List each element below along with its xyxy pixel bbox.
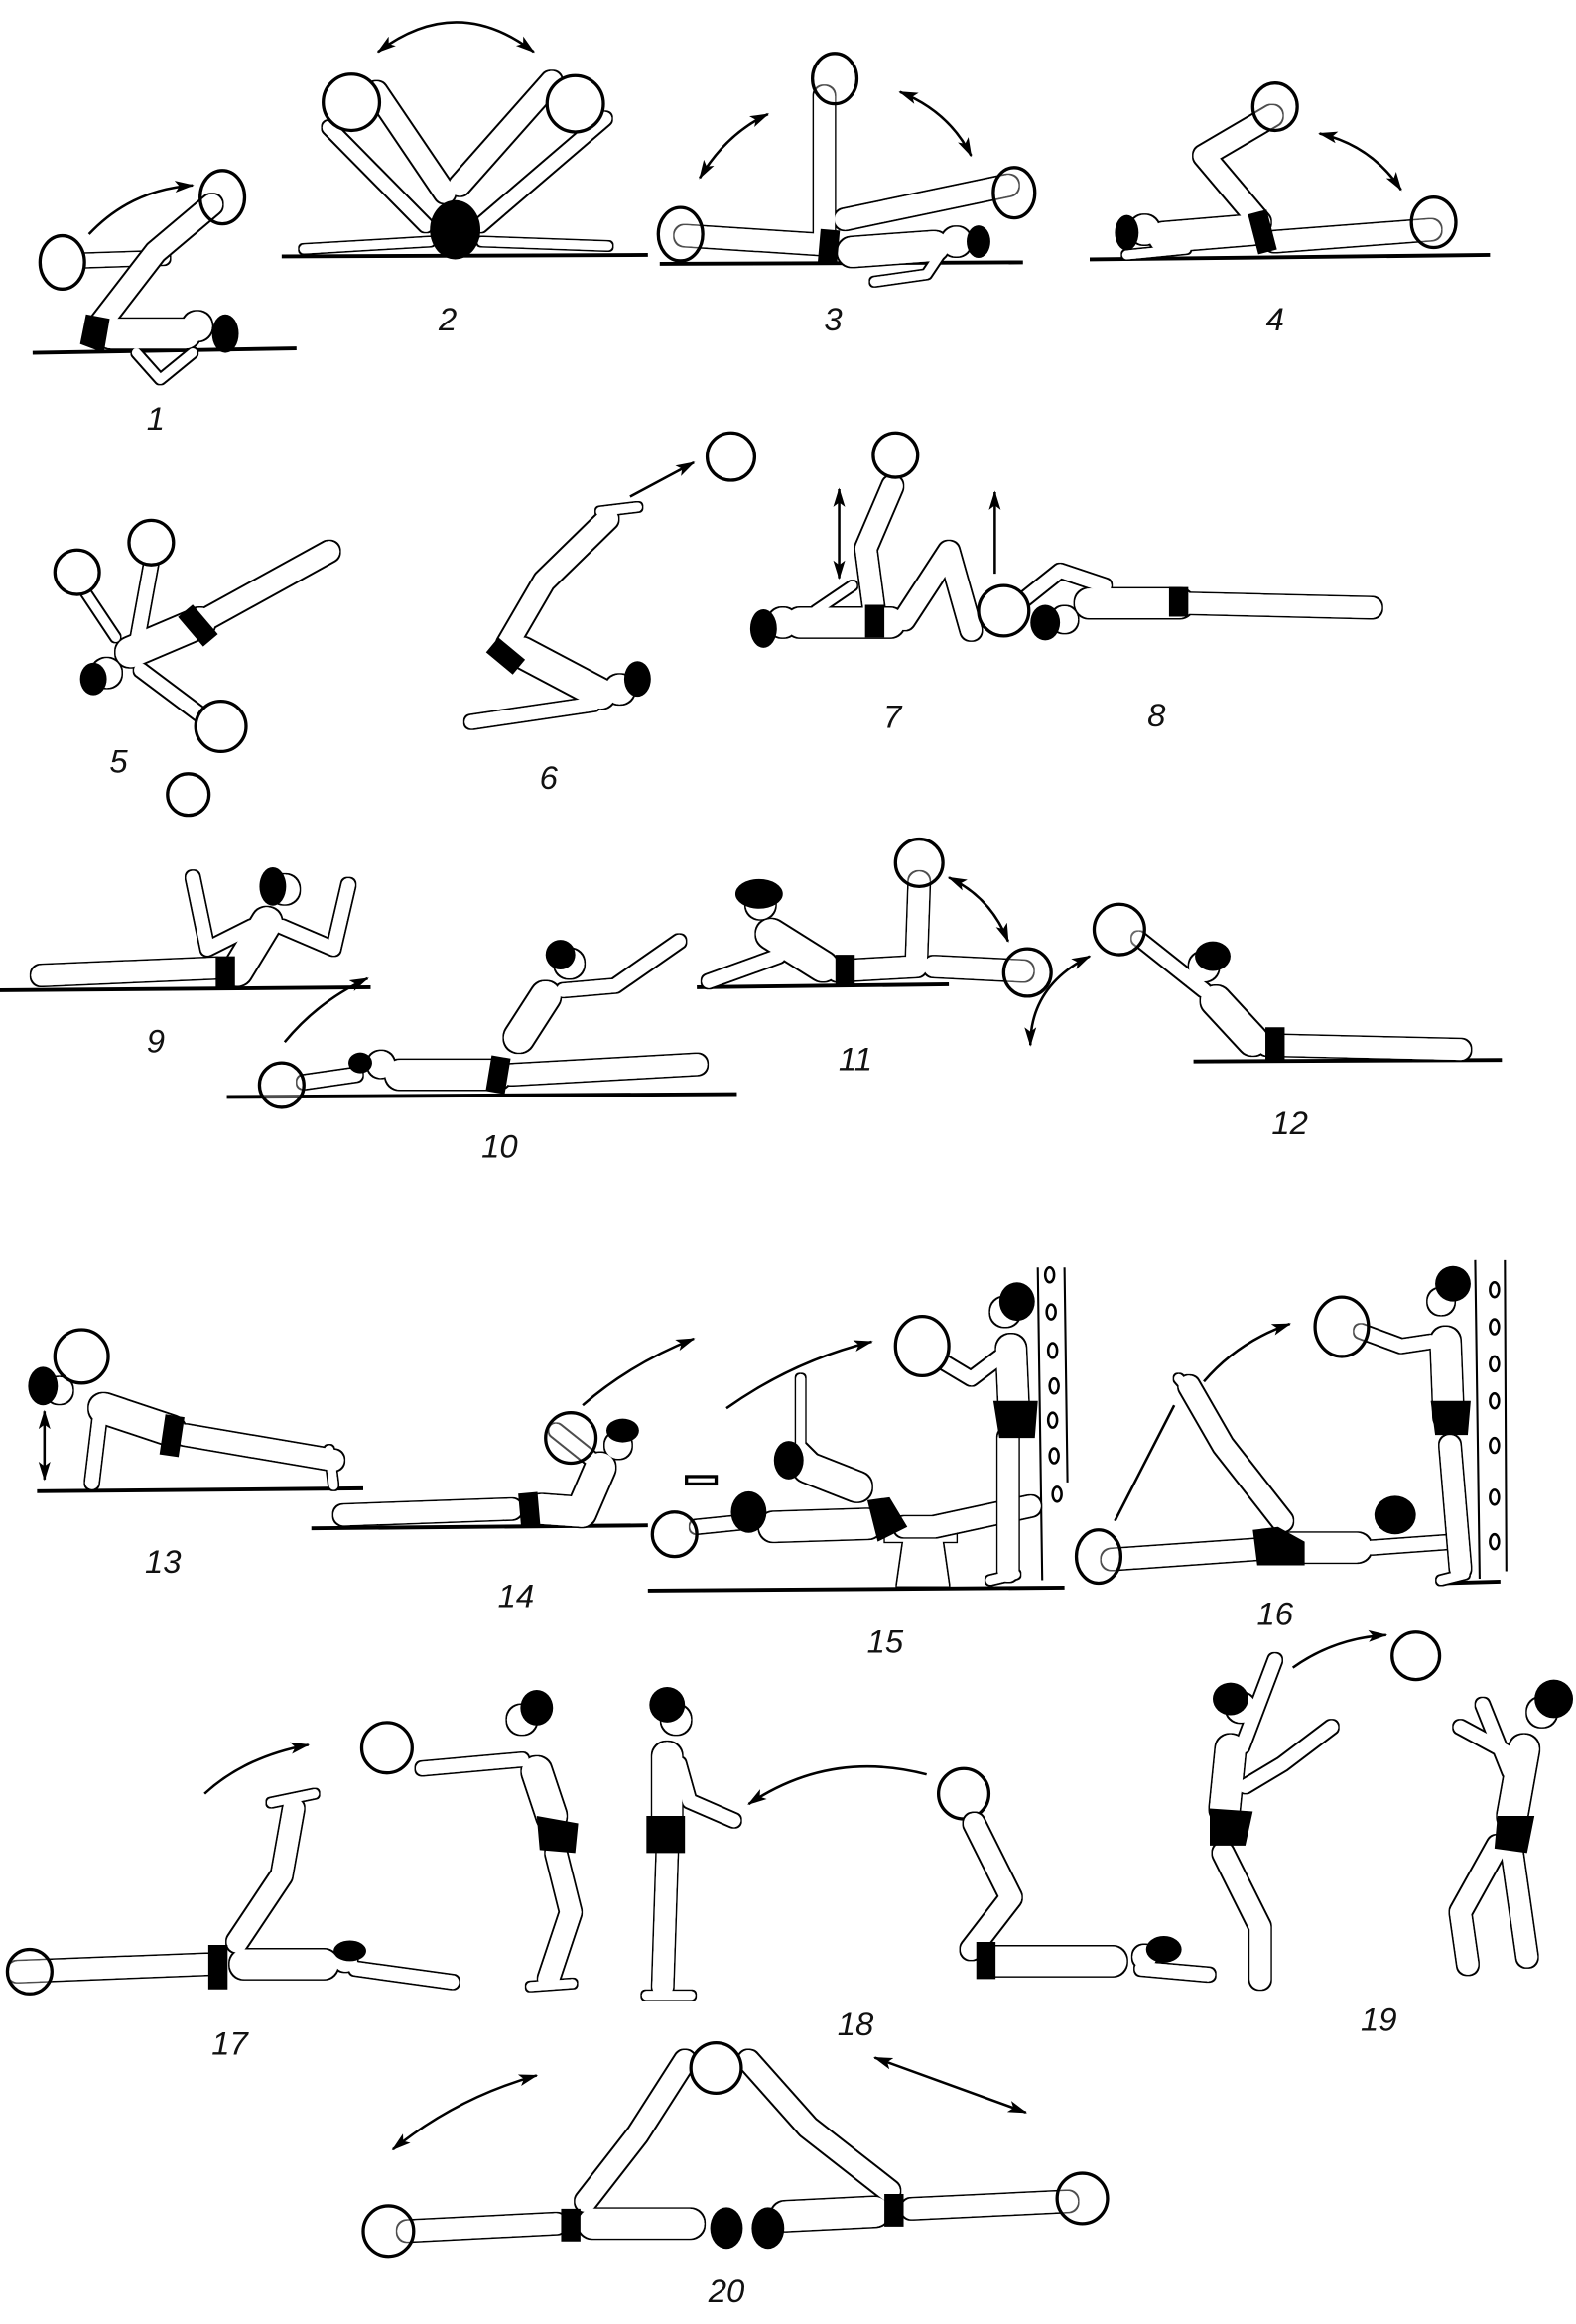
ball left [658, 207, 703, 261]
ball [873, 433, 918, 477]
standing hair [520, 1690, 553, 1726]
floor [312, 1525, 648, 1528]
label 14: 14 [498, 1577, 534, 1614]
hair [28, 1366, 58, 1405]
balls [895, 839, 943, 886]
label 10: 10 [481, 1128, 518, 1165]
body [42, 874, 348, 975]
ball right [547, 75, 603, 132]
arrows [700, 114, 768, 178]
flying ball [1392, 1632, 1440, 1680]
floor [282, 255, 648, 256]
hair [348, 1053, 372, 1074]
ball up [1252, 83, 1297, 130]
body [1138, 939, 1460, 1050]
label 5: 5 [109, 742, 128, 779]
arrow [726, 1342, 871, 1408]
trunks [1257, 212, 1267, 252]
arrow [285, 978, 367, 1042]
ball [546, 1413, 596, 1463]
figure 19 [1210, 1632, 1573, 1979]
label 6: 6 [540, 759, 559, 796]
flying ball [362, 1723, 412, 1773]
label 15: 15 [867, 1623, 904, 1660]
body and leg [471, 507, 637, 722]
floor [1446, 1582, 1501, 1583]
body [1023, 571, 1372, 633]
trunks [868, 605, 881, 637]
figure 4 [1090, 83, 1490, 259]
label 19: 19 [1361, 2001, 1397, 2038]
floor [0, 987, 370, 990]
trunks [839, 955, 852, 987]
ball [259, 1063, 304, 1107]
label 20: 20 [708, 2272, 744, 2309]
trunks [80, 315, 110, 353]
floor [697, 984, 949, 987]
left trunks [1210, 1809, 1252, 1846]
lying ball [1077, 1530, 1120, 1583]
left jumper [1223, 1660, 1332, 1979]
arrow [993, 492, 995, 574]
label 3: 3 [824, 301, 843, 337]
standing hair [1435, 1266, 1471, 1302]
ball [979, 585, 1029, 636]
trunks [492, 645, 519, 667]
label 1: 1 [147, 400, 165, 437]
hair [1115, 215, 1138, 250]
ball right [993, 168, 1035, 218]
standing man [1361, 1288, 1465, 1580]
hair [735, 879, 783, 909]
right jumper [1460, 1698, 1557, 1964]
right trunks [887, 2194, 900, 2227]
figure 14 [312, 1339, 694, 1528]
arrow [630, 462, 694, 496]
left trunks [565, 2209, 578, 2242]
figure 2 [282, 22, 648, 259]
figure 10 [227, 940, 736, 1107]
arrow [839, 489, 841, 579]
figure 6 [471, 433, 754, 722]
ball low [40, 236, 84, 289]
standing hair [999, 1282, 1035, 1321]
label 13: 13 [145, 1543, 182, 1580]
body [86, 552, 329, 714]
trunks [186, 610, 210, 640]
ball left [324, 74, 379, 130]
hair [80, 663, 107, 696]
arrow [1293, 1635, 1386, 1668]
hair [730, 1491, 766, 1533]
figure 11 [697, 839, 1090, 1045]
lying hair [1375, 1495, 1416, 1534]
standing trunks [993, 1401, 1038, 1438]
hair [1146, 1936, 1182, 1963]
figure 9 [0, 867, 370, 990]
standing ball [1315, 1297, 1369, 1356]
lying trunks [1252, 1527, 1305, 1566]
label 17: 17 [211, 2025, 250, 2062]
legs raised and body [101, 204, 212, 379]
arrows [393, 2075, 537, 2149]
label 11: 11 [839, 1041, 872, 1078]
wall ladder [1475, 1260, 1507, 1579]
hair [1030, 605, 1060, 640]
hair [259, 867, 286, 906]
floor [37, 1488, 363, 1491]
lying and raised body [697, 1378, 1030, 1527]
arrow [583, 1339, 694, 1405]
trunks [1172, 587, 1185, 616]
standing hair [649, 1687, 685, 1723]
figure 1 [33, 171, 297, 379]
trunks [219, 957, 232, 988]
arrow [748, 1766, 927, 1804]
hair [967, 225, 990, 258]
figure 17 [7, 1690, 579, 1994]
balls [363, 2206, 414, 2257]
figure 3 [658, 54, 1035, 282]
body [709, 882, 1023, 981]
figure 15 [648, 1267, 1068, 1591]
body [768, 486, 971, 637]
label 18: 18 [838, 2005, 874, 2042]
figure 20 [363, 2043, 1108, 2257]
hair [624, 661, 651, 697]
floor [227, 1095, 736, 1097]
floor [1194, 1060, 1502, 1062]
standing trunks [646, 1816, 685, 1853]
trunks [828, 230, 831, 264]
bench [885, 1530, 957, 1586]
figure 12 [1094, 904, 1502, 1062]
arrows [949, 877, 1008, 942]
right hair [751, 2207, 784, 2249]
label 8: 8 [1147, 697, 1166, 733]
raised legs and arms [304, 81, 607, 249]
hair [1195, 942, 1231, 971]
wall ladder [1038, 1267, 1068, 1580]
lying hair [333, 1941, 366, 1961]
body and legs [685, 96, 1008, 282]
standing man [934, 1297, 1020, 1580]
lying trunks [211, 1945, 224, 1990]
lower ball position [71, 258, 163, 261]
ball [939, 1768, 988, 1819]
figure 16 [1077, 1260, 1507, 1583]
trunks [980, 1942, 992, 1979]
floor [1090, 255, 1490, 259]
lying body [18, 1794, 453, 1982]
figure 5 [55, 520, 329, 816]
lying ball [7, 1949, 52, 1994]
arrow [204, 1744, 309, 1794]
ball [1094, 904, 1144, 955]
trunks [495, 1057, 501, 1093]
ball up [813, 54, 856, 104]
left hair [711, 2207, 742, 2249]
standing trunks [1431, 1401, 1471, 1435]
hair [212, 315, 239, 353]
right hair [1534, 1680, 1573, 1718]
figure 8 [979, 492, 1372, 640]
body [304, 942, 697, 1083]
standing man [646, 1705, 733, 1996]
ball [708, 433, 754, 480]
label 2: 2 [438, 301, 457, 337]
ball [55, 1330, 108, 1383]
body and legs [1126, 116, 1431, 255]
label 12: 12 [1271, 1104, 1308, 1141]
trunks [528, 1492, 531, 1527]
arrow [1320, 133, 1401, 190]
figure 18 [646, 1687, 1209, 1996]
hair [750, 609, 777, 648]
balls [129, 520, 174, 565]
lying body [1112, 1378, 1453, 1560]
body [344, 1431, 631, 1515]
arrow [89, 186, 193, 234]
left hair [1213, 1683, 1248, 1715]
standing trunks [537, 1816, 579, 1853]
trunks [169, 1416, 175, 1456]
ball [652, 1512, 697, 1557]
standing man [423, 1705, 573, 1987]
arrow [378, 22, 534, 52]
body [46, 1377, 333, 1485]
figure 7 [750, 433, 971, 648]
trunks [867, 1497, 907, 1542]
lying man [971, 1823, 1209, 1975]
ball low [1411, 197, 1456, 247]
floor [33, 348, 297, 353]
label 4: 4 [1266, 301, 1284, 337]
hair [606, 1419, 639, 1443]
label 16: 16 [1256, 1595, 1294, 1631]
floor [648, 1588, 1065, 1591]
head [430, 200, 480, 259]
marker bar [687, 1477, 717, 1484]
trunks [1268, 1027, 1281, 1062]
standing ball [895, 1317, 949, 1375]
arrow [44, 1411, 46, 1480]
label 7: 7 [883, 699, 903, 735]
ball high [200, 171, 244, 224]
figure 13 [28, 1330, 363, 1491]
label 9: 9 [147, 1023, 165, 1060]
bodies [408, 2061, 1068, 2231]
floor [660, 262, 1023, 264]
arrows [1115, 1405, 1174, 1521]
right trunks [1495, 1816, 1534, 1853]
